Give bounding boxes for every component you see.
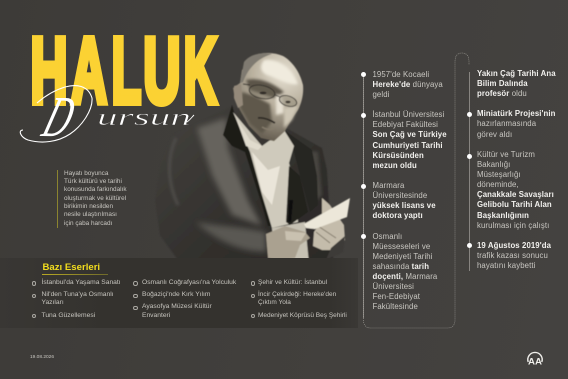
head: [233, 53, 303, 141]
event university: [361, 110, 447, 170]
works list column 1: [32, 278, 121, 318]
event university: İstanbul Üniversitesi: [372, 110, 444, 119]
bio paragraph: için çaba harcadı: [64, 220, 112, 227]
works heading: Bazı Eserleri: [42, 262, 100, 272]
event university: Cumhuriyeti Tarihi: [372, 141, 443, 150]
event 1957: [361, 70, 443, 99]
event Çanakkale: Kültür ve Turizm: [477, 150, 535, 159]
left hand: [266, 226, 310, 260]
lapels: [223, 105, 272, 226]
works list column 2: Osmanlı Coğrafyası'na Yolculuk: [142, 279, 236, 286]
event 2019: [467, 241, 551, 270]
icon: AA logo: [527, 352, 543, 367]
event 1957: 1957'de Kocaeli: [372, 70, 429, 78]
works background band: [0, 258, 358, 328]
bio paragraph: oluşturmak ve kültürel: [64, 195, 126, 202]
works list column 1: İstanbul'da Yaşama Sanatı: [42, 279, 121, 286]
bio paragraph: nesile ulaştırılması: [64, 211, 117, 218]
event associate professor: Müesseseleri ve: [372, 242, 430, 251]
eyes: [260, 92, 266, 94]
event associate professor: Osmanlı: [372, 232, 402, 241]
event masters: doktora yaptı: [372, 211, 423, 220]
pocket and pen: [286, 166, 308, 225]
timeline column left: [361, 70, 447, 311]
ear: [234, 84, 243, 108]
event professor: [477, 69, 556, 98]
event masters: yüksek lisans ve: [372, 201, 436, 210]
event masters: Marmara: [372, 181, 404, 190]
bio paragraph: konusunda farkındalık: [64, 186, 127, 193]
event Miniatürk: görev aldı: [477, 130, 512, 139]
title: HALUK: A: [71, 18, 107, 122]
event professor: Bilim Dalında: [477, 79, 528, 88]
heading underline: [42, 274, 108, 275]
event masters: [361, 181, 436, 220]
event 1957: geldi: [372, 90, 389, 99]
works list column 3: Medeniyet Köprüsü Beş Şehirli: [258, 312, 347, 318]
event associate professor: Fakültesinde: [372, 302, 418, 311]
event Çanakkale: [467, 150, 554, 230]
event Miniatürk: [467, 109, 555, 139]
mouth: [258, 118, 275, 123]
title: HALUK: L: [112, 18, 141, 122]
bio paragraph: Türk kültürü ve tarihi: [64, 178, 122, 185]
timeline column right: [467, 69, 556, 270]
right hand: [313, 198, 345, 250]
works list column 1: Tuna Güzellemesi: [42, 312, 95, 318]
event 2019: 19 Ağustos 2019'da: [477, 241, 551, 250]
title: HALUK: K: [184, 18, 217, 122]
event associate professor: Üniversitesi: [372, 282, 414, 291]
bio accent line: [57, 170, 58, 228]
shirt: [233, 112, 298, 228]
date: 19.08.2026: [30, 355, 54, 360]
bio paragraph: [64, 170, 127, 227]
card: [304, 198, 350, 229]
works list column 1: Nil'den Tuna'ya Osmanlı: [42, 291, 114, 298]
event Çanakkale: Bakanlığı: [477, 160, 510, 169]
event 1957: Hereke'de dünyaya: [372, 80, 443, 89]
event Miniatürk: Miniatürk Projesi'nin: [477, 109, 555, 118]
event 2019: trafik kazası sonucu: [477, 251, 548, 260]
event Çanakkale: Müsteşarlığı: [477, 170, 521, 179]
event masters: Üniversitesinde: [372, 191, 427, 200]
event university: Kürsüsünden: [372, 151, 424, 160]
works list column 2: [133, 279, 236, 319]
works list column 3: Çıktım Yola: [258, 299, 291, 306]
event associate professor: doçenti, Marmara: [372, 272, 437, 281]
portrait photo: [158, 52, 350, 258]
jacket: [158, 105, 350, 258]
event associate professor: sahasında tarih: [372, 262, 429, 271]
works list column 2: Envanteri: [142, 312, 170, 319]
event Çanakkale: Başkanlığının: [477, 211, 529, 220]
works list column 3: İncir Çekirdeği: Hereke'den: [258, 291, 336, 298]
event university: Edebiyat Fakültesi: [372, 120, 438, 129]
works list column 3: [251, 278, 347, 318]
event Çanakkale: Çanakkale Savaşları: [477, 190, 554, 199]
works list column 3: Şehir ve Kültür: İstanbul: [258, 279, 327, 286]
bio paragraph: Hayatı boyunca: [64, 170, 108, 176]
event Çanakkale: döneminde,: [477, 180, 519, 189]
works list column 1: Yazıları: [42, 299, 64, 306]
event university: mezun oldu: [372, 161, 417, 170]
works list column 2: Boğaziçi'nde Kırk Yılım: [142, 291, 210, 298]
script subtitle: Dursun: ursun: [97, 105, 191, 131]
title: HALUK: U: [143, 18, 180, 122]
event associate professor: Fen-Edebiyat: [372, 292, 420, 301]
works list column 2: Ayasofya Müzesi Kültür: [142, 303, 212, 310]
event professor: profesör oldu: [477, 89, 527, 98]
glasses: [243, 83, 298, 109]
title: HALUK: H: [30, 18, 68, 122]
event Çanakkale: Gelibolu Tarihi Alan: [477, 200, 552, 209]
event professor: Yakın Çağ Tarihi Ana: [477, 69, 556, 78]
event 2019: hayatını kaybetti: [477, 261, 535, 270]
event associate professor: [361, 232, 438, 311]
works panel: [32, 262, 347, 319]
bio text block: [57, 170, 127, 228]
script subtitle: Dursun: D: [35, 84, 83, 149]
bio paragraph: birikimin nesilden: [64, 203, 113, 210]
event Çanakkale: kurulması için çalıştı: [477, 221, 549, 230]
event associate professor: Medeniyeti Tarihi: [372, 252, 433, 261]
event university: Son Çağ ve Türkiye: [372, 130, 447, 139]
event Miniatürk: hazırlanmasında: [477, 119, 536, 128]
